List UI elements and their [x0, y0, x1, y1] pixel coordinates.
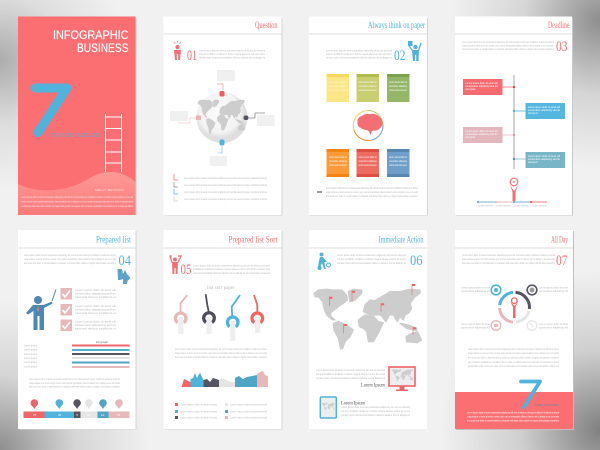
intro text [326, 48, 393, 60]
body text: duis aute irure dolor in reprehenderit in voluptate velit esse cillum dolore eu fugiat nulla pariatur excepteur [29, 384, 120, 388]
big number 7 [35, 88, 67, 132]
legend: Lorem ipsum dolor sit amet elit sed [230, 416, 267, 420]
heading: Question [255, 20, 278, 30]
timeline card: pink [463, 127, 502, 143]
panel: immediate action [309, 230, 427, 429]
text with monitor: tempor incididunt ut labore et dolore magna aliqua ut enim ad minim [316, 372, 385, 376]
timeline card: red: Lorem ipsum dolor sit amet elit [466, 81, 498, 85]
intro text: magna aliqua ut enim ad minim veniam quis nostrud exercitation ullamco laboris nisi ut aliquip ex ea commodo [24, 257, 116, 261]
big number 7 [521, 382, 540, 407]
callout: bottom [210, 140, 227, 166]
list rows: Lorem ipsum dolor sit amet consectetur adipiscing elit sed do eiusmod tempor incididunt ut labore [184, 197, 267, 201]
card text: Lorem ipsum dolor sit [329, 155, 347, 159]
ring chart [500, 292, 529, 322]
footer subtitle: STEPS TO SUCCESS [535, 403, 559, 407]
footer band [455, 392, 573, 429]
area chart [182, 371, 268, 387]
number 04: 04 [118, 253, 131, 269]
legend: Lorem ipsum dolor sit amet elit sed [230, 410, 267, 414]
intro text: Lorem ipsum dolor sit amet consectetur adipiscing elit sed do eiusmod [326, 48, 392, 52]
card text: consectetur adipiscing [389, 84, 407, 88]
body text [29, 377, 120, 388]
timeline base: Lorem ipsum [496, 204, 511, 208]
heading: Immediate Action [378, 234, 424, 244]
timeline card: pink: consectetur adipiscing sed do [466, 132, 498, 136]
body text: magna aliqua ut enim ad minim veniam quis nostrud exercitation ullamco laboris nisi ut aliquip ex ea commodo [468, 351, 559, 355]
card text: Lorem ipsum dolor sit [389, 80, 407, 84]
intro text: veniam quis nostrud exercitation ullamco laboris nisi ut aliquip ex [326, 56, 393, 60]
icon: pink circle [491, 321, 501, 330]
text with tablet: veniam quis nostrud exercitation ullamco laboris nisi ut aliquip ex [341, 413, 411, 417]
legend: Lorem ipsum dolor sit amet elit sed [230, 402, 267, 406]
list rows: Lorem ipsum dolor sit amet consectetur adipiscing elit sed do eiusmod tempor incididunt ut labore [184, 183, 267, 187]
number 06: 06 [410, 253, 423, 269]
icon: presenter [26, 290, 56, 330]
panel: question [164, 16, 282, 216]
body text: magna aliqua ut enim ad minim veniam quis nostrud exercitation ullamco laboris nisi ut aliquip ex ea commodo [29, 381, 120, 385]
card text: sed do eiusmod tempor [358, 88, 377, 92]
world map [314, 289, 422, 349]
checklist: eiusmod tempor incididunt ut [75, 295, 116, 299]
icon: tablet [320, 397, 336, 418]
icon: grey circle [527, 321, 537, 330]
icon: dark circle [527, 285, 537, 295]
icon: person in ring [510, 298, 518, 318]
intro text [193, 264, 271, 275]
intro text [199, 48, 266, 60]
checklist: Lorem ipsum dolor sit amet elit [75, 288, 116, 292]
intro text: Lorem ipsum dolor sit amet consectetur adipiscing elit sed do eiusmod tempor incididunt ut labore et dolore [462, 40, 554, 44]
heading: Prepared list [96, 234, 131, 244]
side labels: Lorem ipsum dolor sit amet [539, 322, 568, 326]
globe [196, 92, 248, 143]
location pins [30, 399, 123, 409]
intro text [462, 253, 555, 265]
intro text: duis aute irure dolor in reprehenderit in voluptate velit esse cillum dolore eu fugiat nulla pariatur excepteur [462, 261, 555, 265]
body text [175, 347, 267, 359]
timeline card: pink: Lorem ipsum dolor sit amet elit [466, 129, 498, 133]
intro text: veniam quis nostrud exercitation ullamco laboris nisi ut aliquip ex [199, 56, 266, 60]
panel: all day [455, 230, 574, 430]
text with tablet: Lorem ipsum dolor sit amet consectetur adipiscing elit sed do eiusmod [341, 405, 410, 409]
side labels: Lorem ipsum dolor sit amet [461, 322, 490, 326]
timeline card: teal: tempor [528, 160, 538, 164]
intro text: veniam quis nostrud exercitation ullamco laboris nisi ut aliquip ex [337, 261, 407, 265]
side labels: consectetur adipiscing elit [461, 326, 490, 330]
intro text: tempor incididunt ut labore et dolore magna aliqua ut enim ad minim [337, 257, 406, 261]
timeline card: teal [526, 152, 565, 168]
side labels [461, 286, 568, 330]
footer text: magna aliqua ut enim ad minim veniam quis nostrud exercitation ullamco laboris nisi ut aliquip ex ea commodo [467, 414, 559, 418]
checklist [60, 288, 117, 331]
bar chart: Lorem ipsum [24, 344, 37, 348]
body text: sint occaecat cupidatat non proident sunt in culpa qui officia deserunt mollit anim id est laborum sed ut [468, 360, 559, 364]
callout: top [217, 70, 235, 96]
intro text: duis aute irure dolor in reprehenderit in voluptate velit esse cillum dolore eu fugiat nulla pariatur excepteur [24, 261, 116, 265]
icon: brain in ring [353, 110, 383, 140]
intro text: tempor incididunt ut labore et dolore magna aliqua ut enim ad minim [326, 52, 392, 56]
timeline base: Lorem ipsum [478, 204, 493, 208]
icon: person with paper [408, 41, 421, 61]
segmented bar: 15 [117, 413, 121, 417]
timeline card: red: tempor [466, 87, 476, 91]
bottom text: magna aliqua ut enim ad minim veniam quis nostrud exercitation ullamco laboris nisi ut aliquip ex ea commodo [326, 190, 418, 194]
checklist: Lorem ipsum dolor sit amet elit [75, 304, 116, 308]
legend: Lorem ipsum dolor sit amet elit sed [180, 416, 217, 420]
cover text: minim veniam quis nostrud exercitation ullamco laboris nisi ut aliquip ex ea commodo consequat duis aute irure dolor in reprehenderit [21, 200, 133, 204]
legend: Lorem ipsum dolor sit amet elit sed [180, 402, 217, 406]
subheading: list sort paper [207, 285, 235, 291]
bar chart: Lorem ipsum [24, 352, 37, 356]
number 03: 03 [556, 39, 568, 55]
body text: duis aute irure dolor in reprehenderit in voluptate velit esse cillum dolore eu fugiat nulla pariatur excepteur [175, 355, 267, 359]
map flags [329, 284, 416, 335]
icon: ladder [106, 114, 122, 172]
intro text: Lorem ipsum dolor sit amet consectetur adipiscing elit sed do eiusmod tempor incididunt ut labore et dolore [24, 253, 116, 257]
text with monitor [316, 368, 386, 380]
panel: always think on paper [309, 16, 428, 216]
intro text: nostrud exercitation ullamco laboris nisi ut aliquip ex ea commodo consequat [193, 271, 270, 275]
intro text: magna aliqua ut enim ad minim veniam quis nostrud exercitation ullamco laboris nisi ut aliquip ex ea commodo [462, 257, 555, 261]
icon: running person [318, 252, 330, 270]
card text: sed do eiusmod tempor [389, 88, 407, 92]
intro text: Lorem ipsum dolor sit amet consectetur adipiscing elit sed do eiusmod [337, 253, 406, 257]
cover title: BUSINESS [77, 41, 128, 55]
footer text: duis aute irure dolor in reprehenderit in voluptate velit esse cillum dolore eu fugiat nulla pariatur excepteur [467, 418, 559, 422]
card text: sed do eiusmod tempor [358, 163, 377, 167]
cover title [53, 28, 129, 55]
number 02: 02 [394, 48, 406, 64]
timeline card: teal: consectetur adipiscing sed do [528, 157, 561, 161]
bar chart: Lorem ipsum [24, 356, 37, 360]
segmented bar: 5 [76, 413, 78, 417]
heading: Prepared list Sort [228, 234, 278, 244]
side labels: consectetur adipiscing elit [461, 289, 490, 293]
intro text: Lorem ipsum dolor sit amet consectetur adipiscing elit sed do eiusmod tempor incididunt ut labore et dolore [462, 253, 555, 257]
label: lorem ipsum left: Lorem Ipsum [341, 400, 366, 406]
text with monitor: Lorem ipsum dolor sit amet consectetur adipiscing elit sed do eiusmod [316, 368, 385, 372]
card text: consectetur adipiscing [389, 159, 407, 163]
icon: small figures [118, 269, 130, 284]
card text: Lorem ipsum dolor sit [389, 155, 407, 159]
body text: perspiciatis unde omnis iste natus error sit voluptatem accusantium doloremque laudantium totam rem [468, 364, 559, 368]
side labels: consectetur adipiscing elit [539, 289, 568, 293]
legend [175, 402, 267, 420]
footer text: Lorem ipsum dolor sit amet consectetur adipiscing elit sed do eiusmod tempor incididunt ut labore et dolore [467, 410, 559, 414]
list rows: Lorem ipsum dolor sit amet consectetur adipiscing elit sed do eiusmod tempor incididunt ut labore [184, 176, 267, 180]
card text: consectetur adipiscing [358, 84, 377, 88]
intro text: Lorem ipsum dolor sit amet consectetur adipiscing elit sed do eiusmod [199, 48, 265, 52]
checklist: eiusmod tempor incididunt ut [75, 311, 116, 315]
bottom text [317, 186, 418, 198]
segmented bar: 30 [58, 413, 62, 417]
legend: Lorem ipsum dolor sit amet elit sed [180, 410, 217, 414]
heading: All Day [551, 234, 568, 244]
claw: dark [204, 294, 214, 334]
label: lorem ipsum right: Lorem Ipsum [361, 382, 386, 388]
segmented bar: 10 [101, 413, 105, 417]
body text: Lorem ipsum dolor sit amet consectetur adipiscing elit sed do eiusmod tempor incididunt ut labore et dolore [29, 377, 120, 381]
side labels: Lorem ipsum dolor sit amet [539, 286, 568, 290]
coloured cards [326, 74, 410, 177]
body text: Lorem ipsum dolor sit amet consectetur adipiscing elit sed do eiusmod tempor incididunt ut labore et dolore [468, 347, 559, 351]
intro text: magna aliqua ut enim ad minim veniam quis nostrud exercitation ullamco laboris nisi ut aliquip ex ea commodo [462, 44, 554, 48]
card text: consectetur adipiscing [329, 159, 347, 163]
text with tablet [341, 405, 411, 417]
checklist: consectetur adipiscing sed do [75, 308, 117, 312]
cover title: INFOGRAPHIC [53, 28, 129, 42]
timeline card: blue: consectetur adipiscing sed do [528, 108, 561, 112]
text with monitor: veniam quis nostrud exercitation ullamco laboris nisi ut aliquip ex [316, 376, 386, 380]
claw: red [252, 295, 263, 333]
segmented bar: 25 [33, 413, 37, 417]
checklist: consectetur adipiscing sed do [75, 323, 117, 327]
segmented bar [24, 412, 130, 418]
claw: blue [227, 295, 240, 341]
card text [329, 80, 407, 167]
number 07: 07 [556, 253, 568, 269]
bar chart: Lorem ipsum [24, 364, 37, 368]
card text: Lorem ipsum dolor sit [329, 80, 347, 84]
bar chart [24, 340, 130, 368]
timeline card: red [463, 79, 502, 95]
card text: consectetur adipiscing [358, 159, 377, 163]
side labels: Lorem ipsum dolor sit amet [461, 286, 490, 290]
intro text: tempor incididunt ut labore et dolore magna aliqua ut enim ad minim [199, 52, 265, 56]
cover text: in voluptate velit esse cillum dolore eu fugiat nulla pariatur excepteur sint occaecat cupidatat non proident sunt in culpa qui officia [21, 204, 133, 208]
card text: sed do eiusmod tempor [389, 163, 407, 167]
body text [468, 347, 559, 368]
timeline card: blue: tempor [528, 111, 538, 115]
icon: confused person [174, 41, 181, 60]
cover author: MELLY JENSSON [95, 188, 124, 192]
cover text [21, 195, 133, 208]
text with tablet: tempor incididunt ut labore et dolore magna aliqua ut enim ad minim [341, 409, 410, 413]
card text: sed do eiusmod tempor [329, 88, 347, 92]
callout: left [170, 111, 201, 123]
body text: magna aliqua ut enim ad minim veniam quis nostrud exercitation ullamco laboris nisi ut aliquip ex ea commodo [175, 351, 267, 355]
intro text: duis aute irure dolor in reprehenderit in voluptate velit esse cillum dolore eu fugiat nulla pariatur excepteur [462, 47, 554, 51]
checklist: eiusmod tempor incididunt ut [75, 326, 116, 330]
bar chart: Lorem ipsum [24, 348, 37, 352]
number 01: 01 [187, 48, 197, 64]
icon: blue circle [491, 285, 501, 295]
cover wave [18, 172, 136, 215]
cover subtitle: STEPS TO SUCCESS [49, 133, 100, 139]
timeline base: Lorem ipsum [514, 204, 529, 208]
heading: Always think on paper [368, 20, 425, 30]
bottom text: duis aute irure dolor in reprehenderit in voluptate velit esse cillum dolore eu fugiat nulla pariatur excepteur [326, 194, 418, 198]
claw: pink [175, 295, 187, 334]
intro text: incididunt ut labore et dolore magna aliqua ut enim ad minim veniam quis [193, 267, 271, 271]
card text: sed do eiusmod tempor [329, 163, 347, 167]
card text: Lorem ipsum dolor sit [358, 80, 377, 84]
timeline card: teal: Lorem ipsum dolor sit amet elit [528, 154, 560, 158]
body text: duis aute irure dolor in reprehenderit in voluptate velit esse cillum dolore eu fugiat nulla pariatur excepteur [468, 356, 559, 360]
list rows: Lorem ipsum dolor sit amet consectetur adipiscing elit sed do eiusmod tempor incididunt ut labore [184, 190, 267, 194]
card text: consectetur adipiscing [329, 84, 347, 88]
panel: cover [18, 16, 136, 215]
callout: right [244, 113, 274, 126]
bottom text: Lorem ipsum dolor sit amet consectetur adipiscing elit sed do eiusmod tempor incididunt ut labore et dolore [326, 186, 418, 190]
intro text [24, 253, 116, 265]
checklist: consectetur adipiscing sed do [75, 292, 117, 296]
footer text [467, 410, 559, 422]
bar chart: list graph [96, 340, 108, 344]
timeline base: Lorem ipsum [532, 204, 547, 208]
icon: person holding clock [510, 178, 518, 201]
heading: Deadline [548, 20, 570, 30]
card text: Lorem ipsum dolor sit [358, 155, 377, 159]
checklist: Lorem ipsum dolor sit amet elit [75, 320, 116, 324]
icon: monitor [389, 367, 415, 391]
bar chart: Lorem ipsum [24, 360, 37, 364]
timeline card: pink: tempor [466, 135, 476, 139]
timeline base [477, 201, 547, 208]
timeline card: blue: Lorem ipsum dolor sit amet elit [528, 105, 560, 109]
side labels: consectetur adipiscing elit [539, 326, 568, 330]
list rows [174, 174, 267, 201]
intro text: Lorem ipsum dolor sit amet consectetur adipiscing elit sed do eiusmod tempor [193, 264, 270, 268]
segmented bar: 15 [87, 413, 91, 417]
body text: Lorem ipsum dolor sit amet consectetur adipiscing elit sed do eiusmod tempor incididunt ut labore et dolore [175, 347, 267, 351]
panel: deadline [455, 16, 573, 216]
panel: prepared list [18, 230, 136, 430]
panel: prepared list sort [164, 230, 282, 430]
cover text: Lorem ipsum dolor sit amet consectetur adipiscing elit sed do eiusmod tempor incididunt ut labore et dolore magna aliqua ut enim ad [21, 195, 133, 199]
icon: strong person [170, 256, 181, 274]
intro text [462, 40, 554, 51]
intro text [337, 253, 407, 265]
timeline card: blue [526, 103, 565, 119]
number 05: 05 [180, 262, 192, 278]
timeline [502, 75, 526, 169]
timeline card: red: consectetur adipiscing sed do [466, 84, 498, 88]
